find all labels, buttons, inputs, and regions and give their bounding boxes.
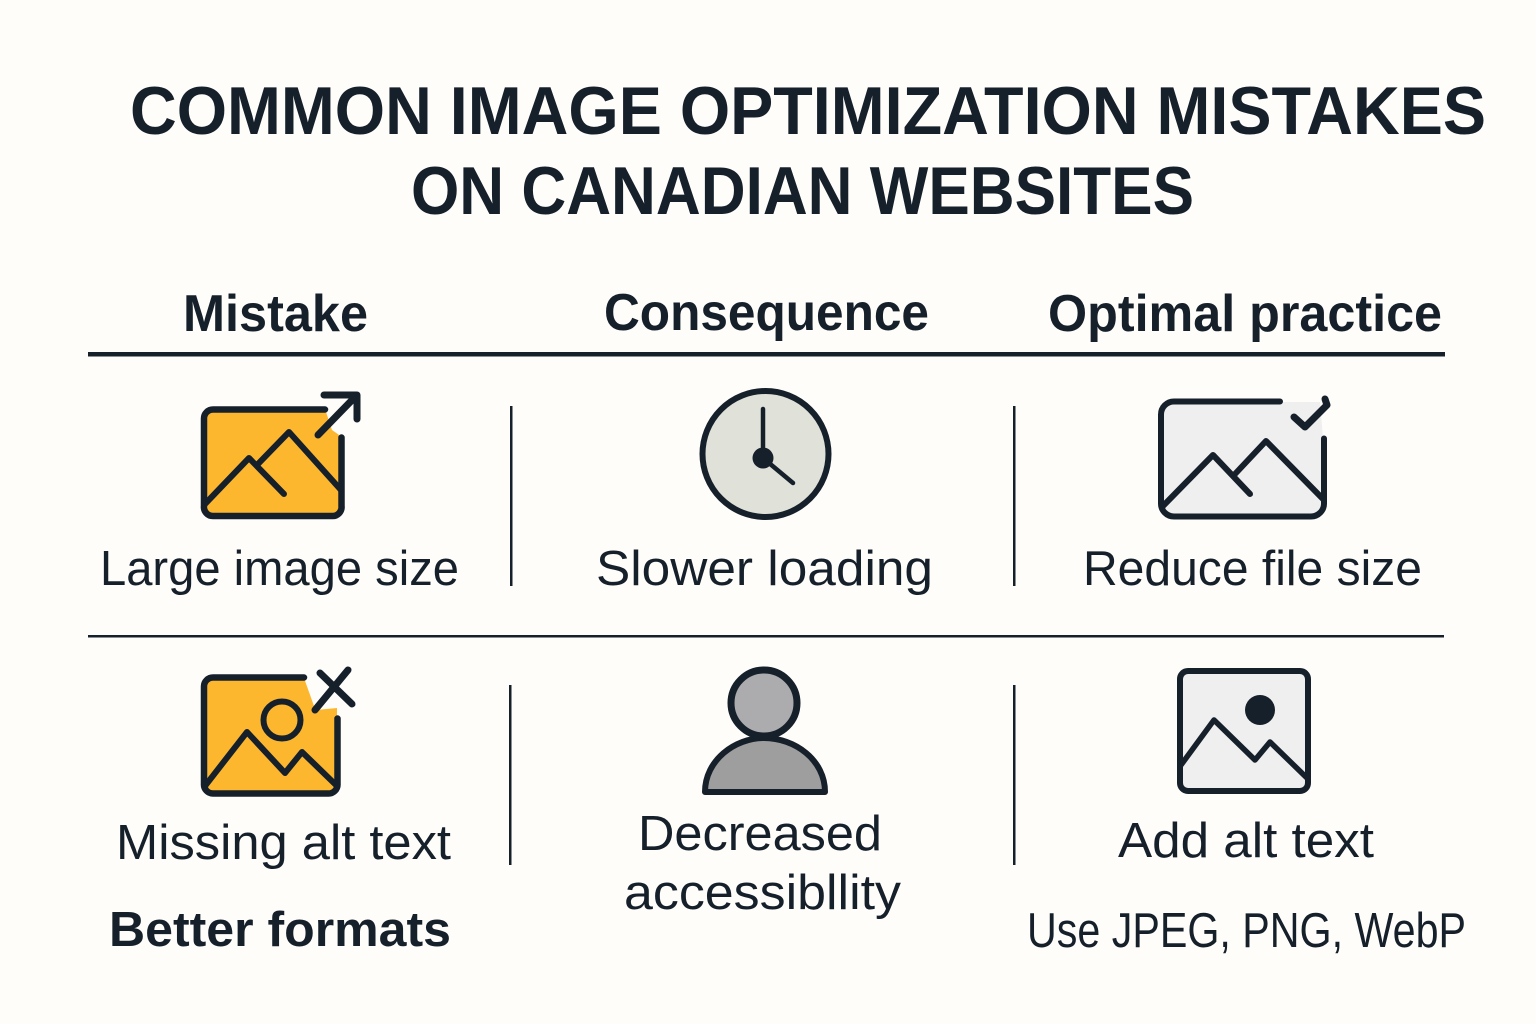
label: Missing alt text: Missing alt text <box>116 816 451 870</box>
label: Decreased accessibility <box>624 807 902 920</box>
column heading: Mistake: Mistake <box>183 285 368 343</box>
title: ON CANADIAN WEBSITES <box>411 153 1194 229</box>
label: Slower loading: Slower loading <box>596 542 933 596</box>
icon: person <box>705 670 825 792</box>
icon: large image with expand arrow <box>204 395 357 516</box>
column heading: Optimal practice: Optimal practice <box>1048 285 1442 343</box>
label: Reduce file size: Reduce file size <box>1083 542 1422 596</box>
icon: optimized image with check mark <box>1161 399 1327 516</box>
label: Use JPEG, PNG, WebP: Use JPEG, PNG, WebP <box>1027 904 1466 958</box>
title <box>130 73 1486 229</box>
label: Large image size: Large image size <box>100 542 459 596</box>
label: Decreased accessibility: accessibllity <box>624 866 902 920</box>
title: COMMON IMAGE OPTIMIZATION MISTAKES <box>130 73 1486 149</box>
icon: image with alt text <box>1180 671 1308 791</box>
label: Add alt text: Add alt text <box>1118 814 1374 868</box>
label: Better formats: Better formats <box>109 903 451 957</box>
label: Decreased accessibility: Decreased <box>638 807 882 861</box>
icon: clock <box>702 391 828 517</box>
icon: image with missing alt text cross <box>204 670 352 794</box>
column heading: Consequence: Consequence <box>604 284 929 342</box>
